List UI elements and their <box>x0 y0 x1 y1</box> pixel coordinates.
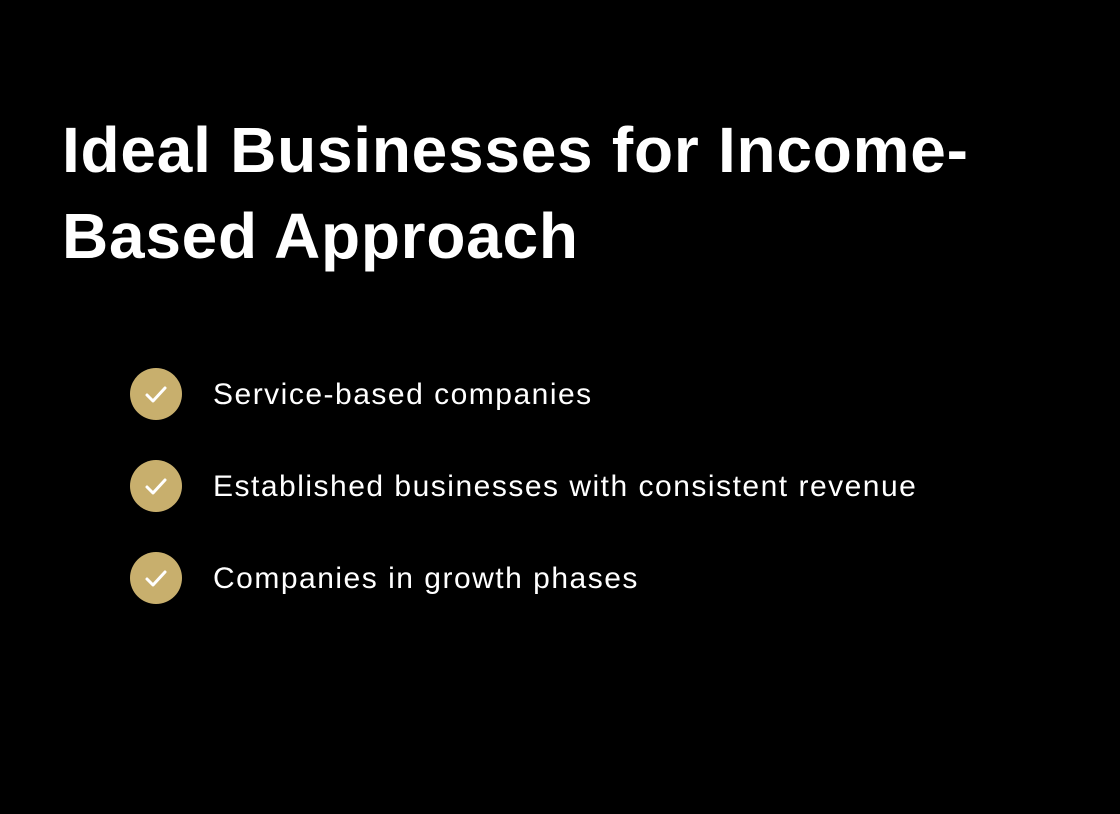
title <box>62 114 969 272</box>
text: Companies in growth phases <box>213 562 639 595</box>
item: established <box>130 460 917 512</box>
text: Service-based companies <box>213 378 593 411</box>
icon: check <box>130 460 182 512</box>
text: Established businesses with consistent revenue <box>213 470 917 503</box>
item: growth <box>130 552 639 604</box>
item: service-based <box>130 368 593 420</box>
icon: check <box>130 368 182 420</box>
icon: check <box>130 552 182 604</box>
title: Based Approach <box>62 200 579 272</box>
title: Ideal Businesses for Income- <box>62 114 969 186</box>
